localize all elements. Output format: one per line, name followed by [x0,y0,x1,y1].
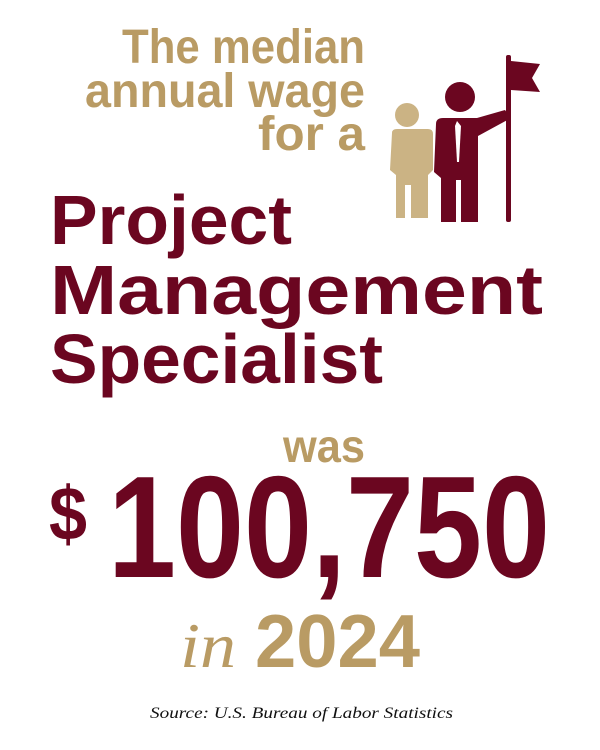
intro heading: for a [258,108,365,161]
intro heading [85,21,365,161]
year: 2024 [255,599,420,683]
icon: people with flag [390,55,540,222]
wage figure: $ [49,472,87,557]
intro heading: The median [122,21,365,74]
job title [50,181,543,398]
job title: Specialist [50,320,383,398]
job title: Management [50,251,543,329]
year [180,599,420,683]
intro heading: annual wage [85,65,365,118]
job title: Project [50,181,292,259]
year: in [180,610,236,681]
text: was: was [282,420,365,472]
source: Source: U.S. Bureau of Labor Statistics [150,705,453,722]
